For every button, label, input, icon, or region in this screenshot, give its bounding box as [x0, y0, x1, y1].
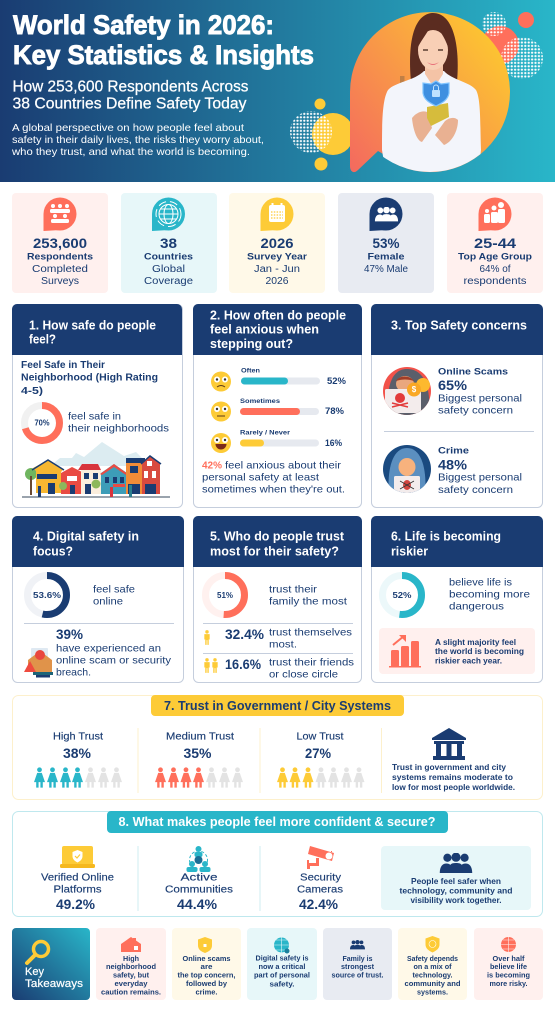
government text: Trust in government and city [392, 762, 506, 772]
government text: low for most people worldwide. [392, 782, 515, 792]
panel 6: riskier [371, 516, 543, 682]
subheading: 4-5) [21, 385, 43, 397]
icon: online scams hacker [383, 367, 431, 415]
active communities: 44.4% [177, 896, 218, 912]
crime text: Biggest personal [438, 472, 522, 484]
icon: age group [478, 198, 512, 231]
donut caption: believe life is [449, 576, 512, 588]
stats text: Global [152, 264, 185, 275]
callout text: feel anxious about their [225, 460, 342, 472]
subtitle [12, 78, 249, 112]
icon: magnifier [27, 942, 48, 963]
title [13, 10, 314, 70]
intro text: safety in their daily lives, the risks they worry about, [12, 134, 264, 146]
panel 5: trust [193, 516, 362, 682]
text: community and [404, 979, 461, 988]
heading: riskier [391, 544, 428, 558]
callout text: A slight majority feel [435, 638, 516, 647]
active communities [165, 846, 233, 912]
security cameras: 42.4% [299, 896, 339, 912]
donut caption: online [93, 596, 123, 608]
crime text: 48% [438, 456, 468, 472]
decorative dots right [481, 12, 543, 79]
donut caption: their neighborhoods [68, 422, 169, 434]
text: source of trust. [332, 970, 384, 980]
stats text [364, 235, 408, 275]
low trust: 27% [305, 745, 332, 761]
stats text: Female [368, 252, 404, 262]
takeaway 1 [96, 928, 166, 1000]
donut 53.6%: 53.6% [33, 590, 62, 600]
stats text [144, 235, 193, 287]
donut 51% [206, 576, 244, 614]
stats text: Countries [144, 252, 193, 262]
panel 3: top concerns [371, 304, 543, 508]
medium trust: 35% [184, 745, 212, 761]
text: safety, but [113, 970, 149, 980]
icon: globe [152, 198, 185, 231]
title: World Safety in 2026: [13, 10, 274, 40]
security cameras: Security [300, 872, 342, 884]
donut caption [449, 576, 530, 612]
title: Key Statistics & Insights [13, 40, 314, 70]
donut 51%: 51% [217, 590, 233, 600]
scam text: breach. [56, 666, 91, 678]
subheading: Feel Safe in Their [21, 359, 105, 371]
text [332, 954, 384, 980]
callout text: technology, community and [400, 886, 512, 896]
panel 2: anxious [193, 304, 362, 508]
stats text: Completed [32, 264, 88, 275]
text [178, 954, 236, 996]
panel 1: how safe [12, 304, 182, 508]
donut caption: feel safe in [68, 410, 121, 422]
crime text: Crime [438, 446, 469, 456]
text: the top concern, [178, 970, 236, 980]
subheading: Neighborhood (High Rating [21, 372, 158, 384]
donut 70% [24, 406, 60, 440]
callout text: People feel safer when [411, 876, 501, 886]
label text [25, 966, 84, 990]
row: often: 52% [327, 376, 346, 386]
callout text: visibility work together. [410, 895, 502, 905]
stats text: respondents [464, 276, 526, 287]
stats text [27, 235, 93, 287]
decorative dots left [290, 98, 354, 170]
verified platforms: Verified Online [41, 872, 114, 884]
icon: coral globe [501, 937, 516, 952]
heading [210, 308, 346, 351]
stats text: 38 [160, 235, 177, 251]
heading: feel? [29, 332, 56, 346]
stat card: survey year [229, 193, 325, 293]
section 7: trust in government [12, 695, 542, 800]
subheading [21, 359, 158, 397]
callout text: 42% [202, 460, 223, 472]
heading: stepping out? [210, 336, 293, 351]
stats text: 25-44 [474, 235, 516, 251]
icon: calendar [260, 198, 294, 231]
icon: shield lock [198, 937, 212, 953]
icon: family [350, 940, 365, 949]
text: Family is [342, 954, 372, 963]
text: Digital safety is [256, 954, 308, 962]
text: followed by [186, 979, 228, 988]
donut 52% [382, 576, 422, 614]
illustration: town [22, 442, 170, 498]
speech bubble [350, 12, 510, 172]
text: on a mix of [414, 962, 452, 971]
row: often: Often [241, 368, 260, 374]
text: Online scams [182, 954, 230, 963]
active communities: Communities [165, 884, 233, 896]
row: friends: trust their friends [269, 656, 354, 668]
security cameras: Cameras [297, 884, 343, 896]
row: friends [204, 656, 354, 680]
high trust [34, 730, 122, 788]
header banner [0, 0, 555, 182]
label text: Takeaways [25, 978, 84, 990]
heading: most for their safety? [210, 544, 339, 558]
text: Safety depends [407, 954, 458, 963]
donut caption: feel safe [93, 584, 135, 596]
stats text: 53% [372, 235, 400, 251]
icon: group [440, 853, 472, 873]
takeaway 4 [323, 928, 392, 1000]
scam text: have experienced an [56, 642, 161, 654]
heading: 6. Life is becoming [391, 528, 501, 544]
row: rarely: Rarely / Never [240, 430, 291, 436]
takeaway 3 [247, 928, 317, 1000]
donut caption: becoming more [449, 588, 530, 600]
text: is becoming [487, 970, 530, 980]
text: High [123, 954, 139, 963]
takeaway 6 [474, 928, 543, 1000]
donut 52%: 52% [392, 590, 412, 600]
row: themselves: 32.4% [225, 626, 265, 642]
heading: 1. How safe do people [29, 318, 156, 332]
icon: people [370, 198, 402, 231]
callout text: sometimes when they're out. [202, 484, 345, 496]
stats text [247, 235, 307, 287]
scam text: online scam or security [56, 654, 172, 666]
text: safety. [270, 980, 294, 988]
subtitle: 38 Countries Define Safety Today [12, 96, 247, 112]
text [101, 954, 161, 996]
crime text: safety concern [438, 484, 513, 496]
verified platforms [41, 846, 114, 912]
stats text: Jan - Jun [254, 264, 300, 275]
medium trust: Medium Trust [166, 730, 234, 742]
text: now a critical [258, 962, 306, 971]
stats text: 2026 [266, 276, 289, 287]
row: rarely: 16% [325, 438, 342, 448]
heading [33, 528, 139, 558]
icon: crime hacker [383, 445, 431, 495]
donut caption [93, 584, 135, 608]
callout text [400, 876, 512, 905]
text: strongest [341, 962, 374, 971]
text: everyday [114, 979, 148, 988]
heading pill [107, 811, 448, 833]
subtitle: How 253,600 Respondents Across [12, 78, 249, 96]
takeaway 5 [398, 928, 467, 1000]
verified platforms: Platforms [54, 884, 102, 896]
callout: riskier [379, 628, 535, 674]
icon: house [121, 937, 141, 952]
heading pill: 7. Trust in Government / City Systems [164, 699, 391, 713]
heading: 2. How often do people [210, 308, 346, 322]
heading: focus? [33, 544, 73, 558]
heading [29, 318, 156, 346]
row: often [211, 368, 346, 392]
text: systems. [417, 988, 448, 996]
low trust [277, 730, 364, 788]
heading [210, 528, 345, 558]
government text: systems remains moderate to [392, 772, 513, 782]
online scams text: Online Scams [438, 366, 508, 378]
text [254, 954, 310, 988]
donut caption [269, 584, 347, 608]
text: more risky. [490, 979, 528, 988]
scam text [56, 626, 172, 678]
heading: 4. Digital safety in [33, 528, 139, 544]
online scams text: safety concern [438, 404, 513, 416]
stats text: Respondents [27, 252, 93, 262]
crime text [438, 446, 522, 496]
intro text [11, 122, 264, 158]
donut 53.6% [28, 576, 66, 614]
text: believe life [490, 962, 527, 971]
section 8: confidence [12, 811, 542, 916]
text: Over half [492, 954, 525, 963]
online scams text [438, 366, 522, 416]
heading pill [151, 695, 404, 716]
callout text [202, 460, 345, 496]
icon: scam envelope [24, 648, 53, 678]
text: crime. [196, 988, 218, 996]
icon: digital globe [274, 938, 290, 954]
stats text: Top Age Group [458, 252, 532, 262]
stat card: female [338, 193, 434, 293]
text: technology. [412, 970, 452, 980]
icon: crowd [44, 198, 76, 231]
text: caution remains. [101, 988, 161, 996]
stats text: Survey Year [247, 252, 307, 262]
label text: Key [25, 966, 44, 978]
donut caption [68, 410, 169, 434]
stats text: Surveys [41, 276, 79, 287]
icon: online scams hacker: $ [412, 385, 417, 394]
stats text: 64% of [480, 264, 511, 275]
security cameras [297, 846, 343, 912]
heading: feel anxious when [210, 322, 319, 336]
row: themselves: most. [269, 638, 297, 650]
panel 4: digital safety [12, 516, 184, 682]
stats text: 47% Male [364, 264, 408, 275]
text: part of personal [254, 970, 310, 980]
callout: people feel safer [381, 846, 531, 910]
stat card: countries [121, 193, 217, 293]
heading: 3. Top Safety concerns [391, 318, 527, 332]
icon: community [186, 846, 210, 872]
stats text [458, 235, 532, 287]
icon: shield check [426, 936, 440, 952]
medium trust [155, 730, 243, 788]
row: themselves [204, 626, 352, 650]
text [404, 954, 461, 996]
callout text: riskier each year. [435, 656, 502, 666]
row: sometimes: Sometimes [240, 398, 280, 405]
stat card: age group [447, 193, 543, 293]
heading [391, 528, 501, 558]
intro text: A global perspective on how people feel about [12, 122, 244, 134]
takeaway 2 [172, 928, 241, 1000]
row: friends: or close circle [269, 668, 338, 680]
donut caption: family the most [269, 596, 347, 608]
intro text: who they trust, and what the world is becoming. [11, 146, 250, 158]
donut 70%: 70% [34, 418, 50, 428]
heading pill: 8. What makes people feel more confident & secure? [118, 815, 435, 829]
stats text: Coverage [144, 276, 193, 287]
stats text: 2026 [260, 235, 294, 251]
icon: laptop shield [60, 846, 95, 868]
online scams text: 65% [438, 377, 468, 393]
text [487, 954, 530, 988]
photo: woman with phone [382, 13, 481, 175]
row: friends: 16.6% [225, 656, 261, 672]
donut caption: dangerous [449, 600, 504, 612]
key takeaways label [12, 928, 90, 1000]
callout text: personal safety at least [202, 472, 319, 484]
callout text [435, 638, 524, 666]
icon: government building [432, 728, 466, 760]
icon: security camera [307, 846, 334, 869]
government text [392, 762, 515, 792]
stat card: respondents [12, 193, 108, 293]
active communities: Active [180, 872, 218, 884]
row: sometimes: 78% [325, 406, 344, 416]
donut caption: trust their [269, 584, 318, 596]
row: themselves: trust themselves [269, 626, 352, 638]
high trust: High Trust [53, 730, 103, 742]
verified platforms: 49.2% [56, 896, 96, 912]
icon: rising bars [389, 635, 421, 668]
row: rarely [211, 430, 342, 453]
row: sometimes [211, 398, 344, 422]
text: neighborhood [106, 962, 156, 971]
stats text: 253,600 [33, 235, 87, 251]
online scams text: Biggest personal [438, 392, 522, 404]
callout text: the world is becoming [435, 647, 524, 656]
scam text: 39% [56, 626, 84, 642]
text: are [200, 962, 212, 971]
low trust: Low Trust [296, 730, 344, 742]
heading: 5. Who do people trust [210, 528, 345, 544]
high trust: 38% [63, 745, 92, 761]
